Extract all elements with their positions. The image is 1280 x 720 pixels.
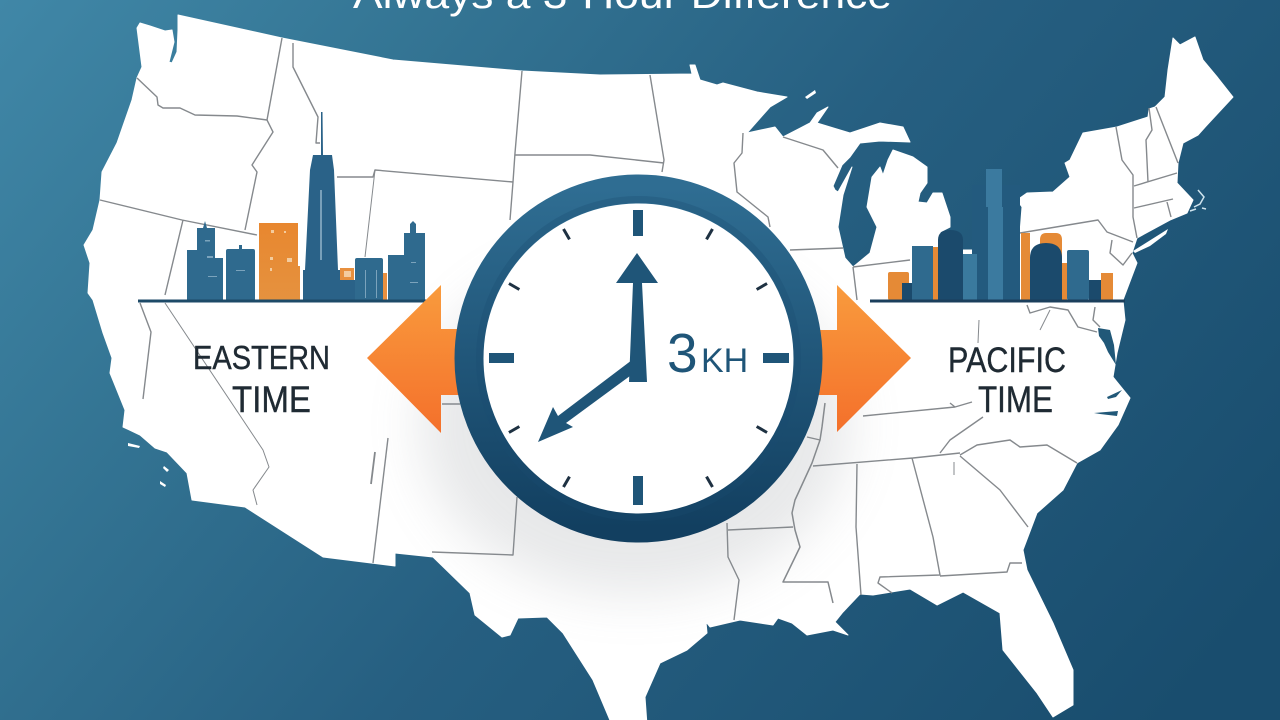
hour hand bbox=[538, 360, 634, 442]
label: pacific time: TIME bbox=[978, 379, 1053, 420]
clock shadow bbox=[420, 255, 850, 595]
label: pacific time bbox=[948, 341, 1066, 420]
clock text: 3KH: 3 bbox=[667, 322, 698, 384]
coastal inlets bbox=[1094, 328, 1122, 416]
islands bbox=[128, 90, 1168, 487]
label: pacific time: PACIFIC bbox=[948, 341, 1066, 380]
building: twin block bbox=[187, 221, 255, 301]
pale block bbox=[963, 254, 977, 300]
clock ring bbox=[469, 189, 808, 528]
left arrow bbox=[367, 285, 460, 433]
building: mid blocks bbox=[340, 221, 425, 301]
left skyline bbox=[138, 112, 427, 302]
ground line bbox=[138, 300, 427, 302]
clock text: 3KH: KH bbox=[701, 342, 748, 380]
building: orange tower bbox=[259, 223, 300, 301]
hour ticks bbox=[489, 210, 789, 505]
label: eastern time bbox=[193, 339, 330, 420]
building: tall spire tower bbox=[303, 112, 340, 301]
clock bbox=[469, 189, 808, 528]
blue blocks bbox=[912, 246, 1089, 300]
minute hand bbox=[616, 253, 658, 382]
building: small orange blocks bbox=[340, 268, 387, 301]
light tower bbox=[986, 169, 1003, 300]
background tower bbox=[972, 185, 1020, 300]
cape cod marks bbox=[1190, 190, 1206, 211]
orange blocks bbox=[888, 233, 1113, 300]
label: eastern time: TIME bbox=[232, 379, 311, 420]
dark blocks bbox=[902, 230, 1101, 300]
right skyline bbox=[870, 169, 1125, 302]
state borders bbox=[100, 38, 1178, 620]
right arrow bbox=[815, 285, 911, 432]
inner rim shade bbox=[480, 200, 798, 518]
minor ticks bbox=[508, 228, 768, 488]
label: eastern time: EASTERN bbox=[193, 339, 330, 376]
window lights bbox=[205, 190, 418, 298]
ground line bbox=[870, 300, 1125, 302]
